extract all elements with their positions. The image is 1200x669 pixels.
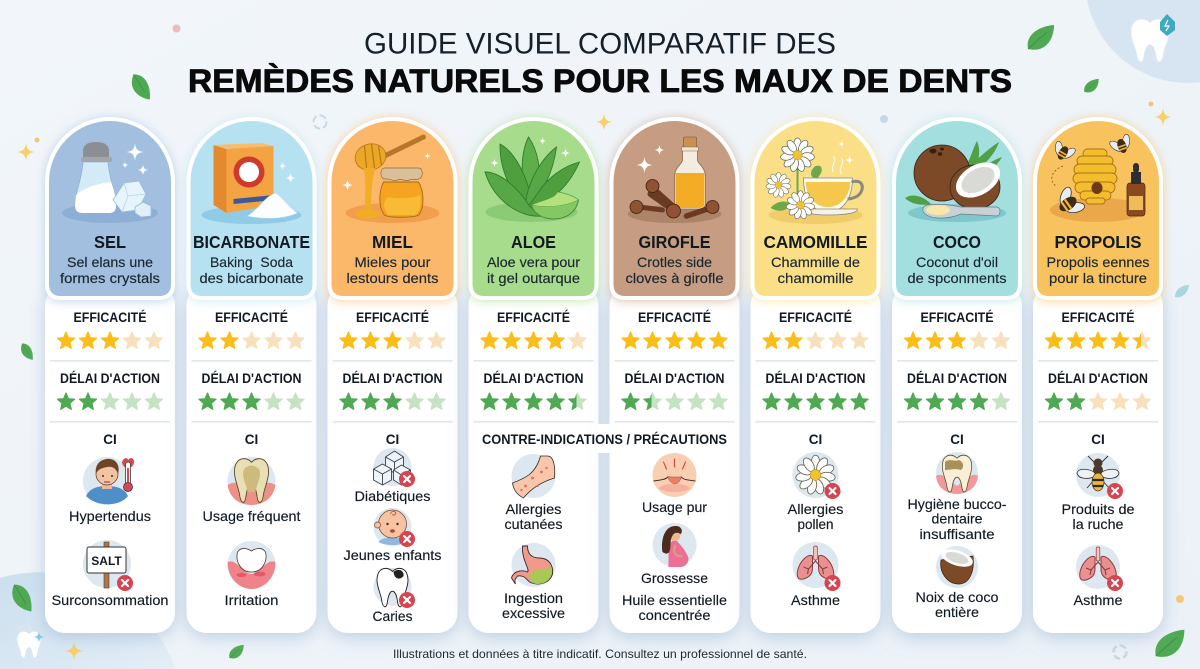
delay stars	[1045, 393, 1151, 409]
icon: honey jar and dipper	[342, 137, 440, 223]
icon: coconut shell	[936, 546, 978, 588]
name: CAMOMILLE	[764, 232, 868, 252]
delay label: DÉLAI D'ACTION	[766, 371, 866, 386]
icon: caries tooth	[374, 568, 415, 608]
icon: aloe plant	[485, 137, 580, 222]
label: Usage fréquent	[202, 508, 301, 524]
label: Irritation	[224, 592, 278, 608]
label: pollen	[798, 516, 834, 532]
efficacy stars	[199, 332, 304, 348]
card body	[468, 285, 598, 633]
description	[60, 254, 160, 286]
description	[626, 254, 724, 286]
description: des bicarbonate	[200, 270, 304, 286]
label: Grossesse	[641, 570, 708, 586]
efficacy stars	[904, 332, 1010, 348]
icon: baking soda box	[202, 143, 302, 224]
description: lestours dents	[346, 270, 438, 286]
efficacy label: EFFICACITÉ	[920, 310, 994, 325]
name: PROPOLIS	[1054, 232, 1142, 252]
label	[504, 501, 562, 532]
column: GIROFLE	[610, 119, 740, 633]
label: Hypertendus	[69, 508, 151, 524]
label: Allergies	[787, 501, 844, 517]
delay label: DÉLAI D'ACTION	[60, 371, 160, 386]
efficacy label: EFFICACITÉ	[638, 310, 711, 325]
description	[771, 254, 860, 286]
label: excessive	[502, 605, 565, 621]
efficacy stars	[622, 332, 727, 348]
icon: daisy allergy	[792, 452, 840, 499]
label: Allergies	[505, 501, 562, 517]
delay label: DÉLAI D'ACTION	[202, 371, 302, 386]
label: Diabétiques	[354, 488, 431, 504]
label: Hygiène bucco-	[907, 496, 1007, 512]
icon: baby	[374, 508, 415, 547]
icon: beehive and tincture	[1048, 132, 1146, 222]
label	[916, 589, 999, 620]
column: SEL	[45, 119, 175, 633]
bridge: contre-indications shared header	[482, 424, 727, 453]
description	[346, 254, 438, 286]
description: Chammille de	[771, 254, 860, 270]
delay stars	[199, 393, 304, 409]
footer note: Illustrations et données à titre indicatif. Consultez un professionnel de santé.	[393, 647, 807, 661]
label	[1062, 501, 1135, 532]
card body	[610, 285, 740, 633]
description: de spconments	[908, 270, 1006, 286]
delay stars	[622, 393, 727, 409]
label: Asthme	[1074, 592, 1123, 608]
delay label: DÉLAI D'ACTION	[907, 371, 1007, 386]
efficacy label: EFFICACITÉ	[215, 310, 288, 325]
label	[622, 592, 727, 623]
efficacy label: EFFICACITÉ	[497, 310, 570, 325]
title: REMÈDES NATURELS POUR LES MAUX DE DENTS	[188, 63, 1012, 99]
label: cutanées	[504, 516, 562, 532]
efficacy label: EFFICACITÉ	[74, 310, 146, 325]
label	[502, 590, 565, 621]
header arch	[188, 119, 314, 298]
label: Surconsommation	[52, 592, 168, 608]
card body	[45, 285, 175, 633]
name: COCO	[933, 232, 981, 252]
CI label: CI	[245, 432, 258, 447]
header arch	[612, 119, 738, 298]
delay stars	[57, 393, 163, 409]
icon: sugar cubes	[374, 448, 415, 487]
header arch	[1035, 119, 1161, 298]
efficacy label: EFFICACITÉ	[779, 310, 852, 325]
delay label: DÉLAI D'ACTION	[342, 371, 442, 386]
name: BICARBONATE	[193, 232, 310, 252]
corner blob top right	[1087, 0, 1200, 83]
description: chamomille	[778, 270, 854, 286]
label: Caries	[372, 608, 412, 624]
description: formes crystals	[60, 270, 160, 286]
efficacy stars	[1045, 332, 1151, 348]
name: SEL	[94, 232, 126, 252]
name: MIEL	[372, 232, 413, 252]
efficacy label: EFFICACITÉ	[1062, 310, 1134, 325]
column: BICARBONATE	[186, 119, 316, 633]
delay label: DÉLAI D'ACTION	[1048, 371, 1148, 386]
card body	[328, 285, 458, 633]
icon: hypertension	[83, 457, 134, 505]
description	[908, 254, 1006, 286]
label: entière	[935, 604, 979, 620]
name: GIROFLE	[638, 232, 710, 252]
description: Mieles pour	[354, 254, 431, 270]
icon: salt sign	[83, 540, 133, 591]
icon: chamomile tea	[766, 138, 862, 224]
header arch	[47, 119, 173, 298]
efficacy label: EFFICACITÉ	[356, 310, 429, 325]
header arch	[470, 119, 596, 298]
column: ALOE	[468, 119, 598, 633]
icon: tooth bottom left	[17, 632, 44, 658]
icon: lungs	[1076, 545, 1123, 591]
label: Asthme	[791, 592, 840, 608]
label: Huile essentielle	[622, 592, 727, 608]
efficacy stars	[763, 332, 868, 348]
name: ALOE	[511, 232, 556, 252]
delay stars	[481, 393, 586, 409]
icon: irritated lips	[652, 453, 696, 497]
icon: tooth top right	[1131, 14, 1175, 62]
header arch	[752, 119, 878, 298]
column: MIEL	[328, 119, 458, 633]
description	[487, 254, 580, 286]
CI label: CI	[809, 432, 822, 447]
icon: gum irritation	[228, 541, 276, 589]
label: Usage pur	[642, 499, 707, 515]
label: insuffisante	[920, 526, 995, 542]
label: la ruche	[1073, 516, 1124, 532]
title	[188, 28, 1012, 99]
description: pour la tincture	[1049, 270, 1147, 286]
icon: stained tooth	[936, 452, 978, 494]
CI label: CI	[386, 432, 399, 447]
label: Noix de coco	[916, 589, 999, 605]
card body	[750, 285, 880, 633]
icon: coconut	[905, 141, 1006, 222]
column: CAMOMILLE	[750, 119, 880, 633]
label	[908, 496, 1007, 542]
icon: salt sign: SALT	[91, 554, 122, 568]
description: Crotles side	[637, 254, 712, 270]
icon: stained tooth	[228, 457, 276, 505]
description: it gel outarque	[487, 270, 580, 286]
label: Ingestion	[504, 590, 563, 606]
efficacy stars	[481, 332, 586, 348]
column: PROPOLIS	[1033, 119, 1163, 633]
efficacy stars	[340, 332, 445, 348]
description	[200, 254, 304, 286]
delay label: DÉLAI D'ACTION	[624, 371, 724, 386]
description	[1046, 254, 1150, 286]
card body	[186, 285, 316, 633]
delay label: DÉLAI D'ACTION	[484, 371, 584, 386]
bridge: contre-indications shared header: CONTRE-INDICATIONS / PRÉCAUTIONS	[482, 432, 727, 447]
delay stars	[904, 393, 1010, 409]
CI label: CI	[1091, 432, 1105, 447]
header arch	[330, 119, 456, 298]
description: Aloe vera pour	[487, 254, 580, 270]
CI label: CI	[103, 432, 117, 447]
label: dentaire	[931, 510, 983, 526]
label: Produits de	[1062, 501, 1135, 517]
header arch	[894, 119, 1020, 298]
icon: stomach	[512, 543, 556, 587]
efficacy stars	[57, 332, 163, 348]
CI label: CI	[950, 432, 964, 447]
description: Baking Soda	[210, 254, 293, 270]
description: Propolis eennes	[1046, 254, 1150, 270]
label: Jeunes enfants	[344, 547, 442, 563]
icon: clove oil bottle and cloves	[628, 137, 722, 223]
icon: pregnant woman	[652, 523, 696, 567]
description: Sel elans une	[67, 254, 153, 270]
delay stars	[340, 393, 445, 409]
icon: skin rash	[512, 454, 556, 498]
description: cloves à girofle	[626, 270, 724, 286]
icon: salt shaker and crystals	[62, 142, 158, 223]
label	[788, 501, 844, 532]
corner blob bottom left	[0, 572, 175, 669]
column: COCO	[892, 119, 1022, 633]
description: Coconut d'oil	[916, 254, 998, 270]
title: GUIDE VISUEL COMPARATIF DES	[364, 28, 836, 60]
icon: bee	[1076, 453, 1123, 499]
delay stars	[763, 393, 868, 409]
icon: lungs	[792, 542, 840, 591]
label: concentrée	[638, 607, 711, 623]
card body	[1033, 285, 1163, 633]
card body	[892, 285, 1022, 633]
